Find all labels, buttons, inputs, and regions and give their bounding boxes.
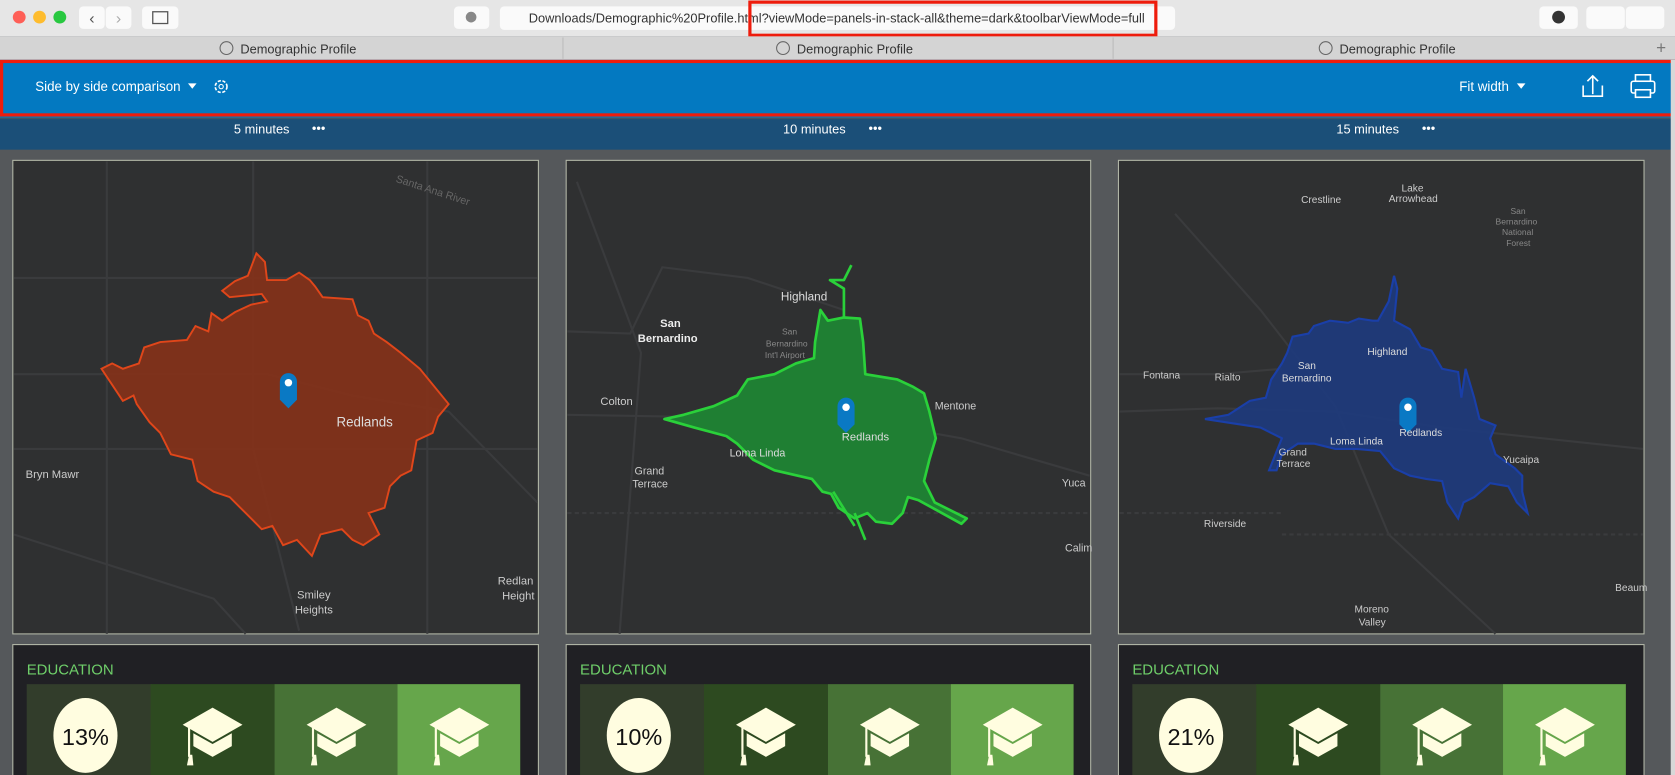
map panel: 15 minutes: Moreno [1355,605,1389,616]
map panel: 10 minutes: Highland [781,290,827,303]
browser title bar [0,0,1675,36]
tab bar: Demographic Profile [797,41,913,56]
map panel: 10 minutes: Redlands [842,431,890,443]
education panel: 5 minutes [13,645,538,775]
pin [280,373,297,408]
browser title bar: Downloads/Demographic%20Profile.html?viewMode=panels-in-stack-all&theme=dark&toolbarViewMode=full [529,10,1145,25]
education panel: 10 minutes: 10% [615,724,662,750]
map panel: 10 minutes: Terrace [632,478,668,490]
education panel: 15 minutes: EDUCATION [1132,662,1219,679]
column headers: 15 minutes [1336,122,1399,137]
map panel: 10 minutes: San [782,327,797,337]
map panel: 5 minutes: Santa Ana River [394,173,472,209]
map panel: 15 minutes: San [1298,361,1316,372]
map panel: 15 minutes: Arrowhead [1389,194,1438,205]
map panel: 15 minutes: Yucaipa [1503,455,1539,466]
map panel: 15 minutes: Redlands [1399,428,1442,439]
map panel: 15 minutes: Riverside [1204,519,1247,530]
column headers: 10 minutes [783,122,846,137]
map panel: 10 minutes: Grand [635,466,664,478]
column headers: 5 minutes [234,122,289,137]
isochrone blue [1205,276,1528,518]
map panel: 10 minutes: Bernardino [638,333,698,345]
map panel: 15 minutes: National [1502,227,1533,237]
map panel: 10 minutes: Colton [600,396,633,408]
map panel: 15 minutes: Crestline [1301,195,1341,206]
column headers: ••• [312,121,325,136]
map panel: 10 minutes: San [660,318,681,330]
education panel: 5 minutes: 13% [62,724,109,750]
map panel: 5 minutes: Redlan [498,576,533,588]
tab bar: Demographic Profile [240,41,356,56]
isochrone orange [101,253,449,556]
map panel: 5 minutes: Height [502,591,535,603]
map panel: 15 minutes: Loma Linda [1330,437,1383,448]
map panel: 10 minutes: Mentone [935,400,976,412]
url field [500,6,1175,30]
map panel: 10 minutes: Loma Linda [730,447,785,459]
map panel: 5 minutes: Bryn Mawr [26,469,79,481]
map panel: 15 minutes: Bernardino [1496,216,1538,226]
education panel: 10 minutes [566,645,1091,775]
map panel: 15 minutes: Bernardino [1282,374,1332,385]
column headers: ••• [868,121,882,136]
map panel: 5 minutes: Redlands [336,415,393,430]
education panel: 10 minutes: EDUCATION [580,662,667,679]
education panel: 15 minutes: 21% [1168,724,1215,750]
map panel: 15 minutes: Valley [1359,617,1387,628]
map panel: 10 minutes: Bernardino [766,338,808,348]
map panel: 15 minutes: Grand [1279,447,1307,458]
map panel: 15 minutes: San [1510,206,1526,216]
map panel: 15 minutes: Beaum [1615,583,1647,594]
map panel: 5 minutes: Smiley [297,590,331,602]
map panel: 15 minutes: Rialto [1215,373,1241,384]
tab bar: Demographic Profile [1340,41,1456,56]
map panel: 15 minutes: Forest [1506,238,1531,248]
map panel: 10 minutes: Yuca [1062,477,1086,489]
isochrone green [664,265,967,540]
column headers: ••• [1422,121,1435,136]
app toolbar: Fit width [1459,79,1509,94]
url highlight box [750,2,1156,35]
app toolbar [0,60,1675,118]
map panel: 15 minutes [1118,160,1647,634]
browser title bar: ‹ [89,10,95,28]
tab bar [0,36,1675,60]
map panel: 10 minutes: Int'l Airport [765,350,806,360]
map panel: 5 minutes [13,160,538,634]
tab bar: + [1656,38,1666,57]
map panel: 15 minutes: Terrace [1277,459,1311,470]
education panel: 15 minutes [1118,645,1644,775]
heading: EDUCATION [27,662,114,679]
map panel: 10 minutes [566,160,1092,634]
tiles [27,684,152,775]
map panel: 15 minutes: Highland [1367,347,1407,358]
map panel: 15 minutes: Fontana [1143,370,1181,381]
map panel: 15 minutes: Lake [1402,183,1424,194]
map panel: 5 minutes: Heights [295,605,333,617]
column headers [0,119,1675,150]
app toolbar: Side by side comparison [35,79,181,94]
map panel: 10 minutes: Calim [1065,543,1092,555]
browser title bar: › [116,10,121,28]
